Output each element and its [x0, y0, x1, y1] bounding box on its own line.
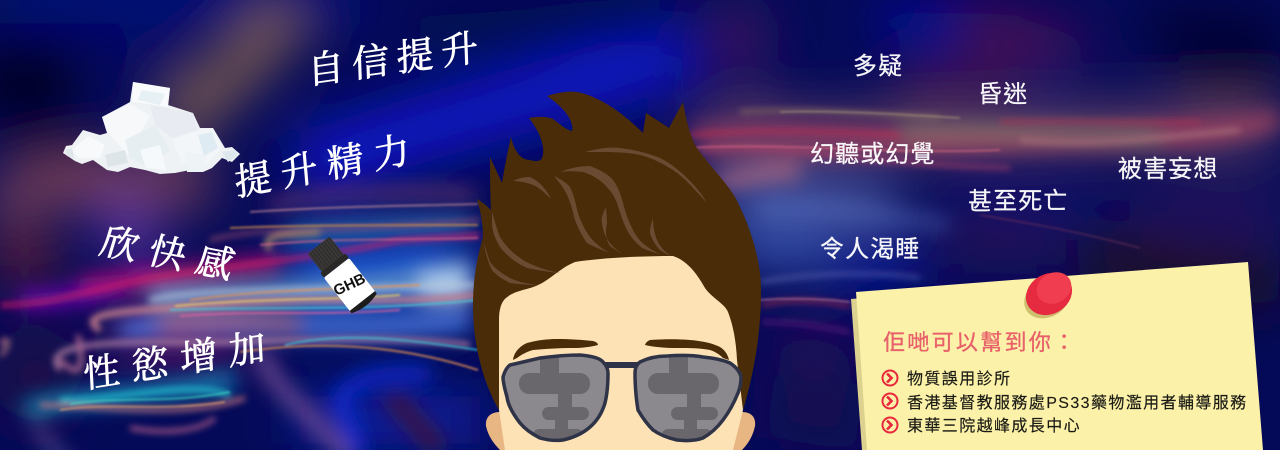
icon: GHB bottle: GHB [331, 270, 368, 300]
text: 性慾增加: 性慾增加 [82, 326, 266, 397]
left lens [503, 355, 608, 440]
text: 昏迷: 昏迷 [978, 81, 1028, 108]
text: 自信提升: 自信提升 [307, 27, 479, 93]
ear: right [730, 412, 755, 450]
text: 被害妄想: 被害妄想 [1118, 156, 1218, 183]
left lens camouflage [519, 355, 590, 443]
ear: left [486, 412, 510, 450]
left lens frame [503, 355, 608, 440]
right lens frame [635, 355, 741, 441]
text: 甚至死亡: 甚至死亡 [968, 188, 1068, 215]
list item 2: 香港基督教服務處PS33藥物濫用者輔導服務 [907, 393, 1248, 412]
text: 欣快感: 欣快感 [95, 221, 239, 287]
icon: sugar-like crystals [63, 82, 240, 174]
eyebrow: left [513, 339, 598, 360]
heading: 佢哋可以幫到你： [883, 330, 1077, 355]
right lens camouflage [648, 355, 719, 443]
text: 幻聽或幻覺: 幻聽或幻覺 [810, 141, 936, 168]
hair [473, 92, 761, 410]
text: 提升精力: 提升精力 [233, 129, 412, 205]
note shadow [851, 280, 1100, 450]
eyebrow: right [645, 339, 729, 360]
text: 令人渴睡: 令人渴睡 [820, 236, 920, 263]
right lens [635, 355, 741, 441]
icon: GHB bottle [304, 234, 380, 317]
character: head with hair and sunglasses [473, 92, 761, 450]
list item 1: 物質誤用診所 [907, 370, 1011, 388]
hair highlights [484, 148, 707, 285]
sunglasses [503, 355, 741, 443]
bridge [605, 362, 638, 368]
list item 3: 東華三院越峰成長中心 [907, 417, 1081, 435]
pin [1017, 265, 1080, 326]
text: 多疑: 多疑 [853, 53, 903, 80]
note paper [856, 262, 1263, 450]
panel: sticky note [851, 262, 1263, 450]
face [499, 256, 743, 450]
